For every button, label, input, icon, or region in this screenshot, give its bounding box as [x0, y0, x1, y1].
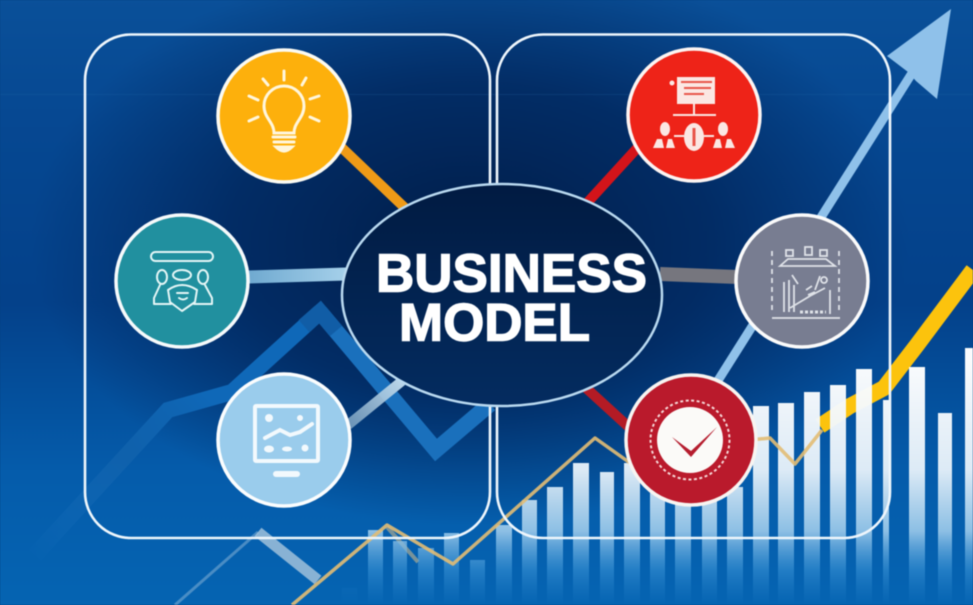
node: light blue monitor	[218, 374, 350, 506]
icon: team	[151, 252, 213, 311]
node: red organisation	[628, 49, 760, 181]
icon: checkmark seal	[650, 400, 730, 480]
title: model: MODEL	[399, 294, 590, 352]
background faint zigzag line	[175, 527, 418, 605]
icon: organisation chart	[653, 77, 735, 151]
icon: analytics monitor	[255, 406, 318, 477]
node: dark red checkmark	[626, 375, 756, 505]
panel: left frame	[85, 34, 490, 538]
node: grey planning	[736, 215, 868, 347]
background blue zigzag line	[35, 312, 490, 555]
rising yellow trend line	[820, 270, 973, 426]
icon: planning sketch	[772, 247, 840, 318]
node: yellow lightbulb	[218, 50, 350, 182]
node: teal team	[116, 215, 248, 347]
connectors	[248, 145, 738, 430]
bar chart	[342, 348, 973, 605]
panel: right frame	[497, 34, 890, 538]
icon: lightbulb	[249, 71, 319, 151]
title: business: BUSINESS	[376, 244, 647, 304]
central hub: business model	[342, 184, 662, 406]
rising gold thin line	[292, 430, 822, 605]
rising light blue arrow	[712, 9, 951, 390]
